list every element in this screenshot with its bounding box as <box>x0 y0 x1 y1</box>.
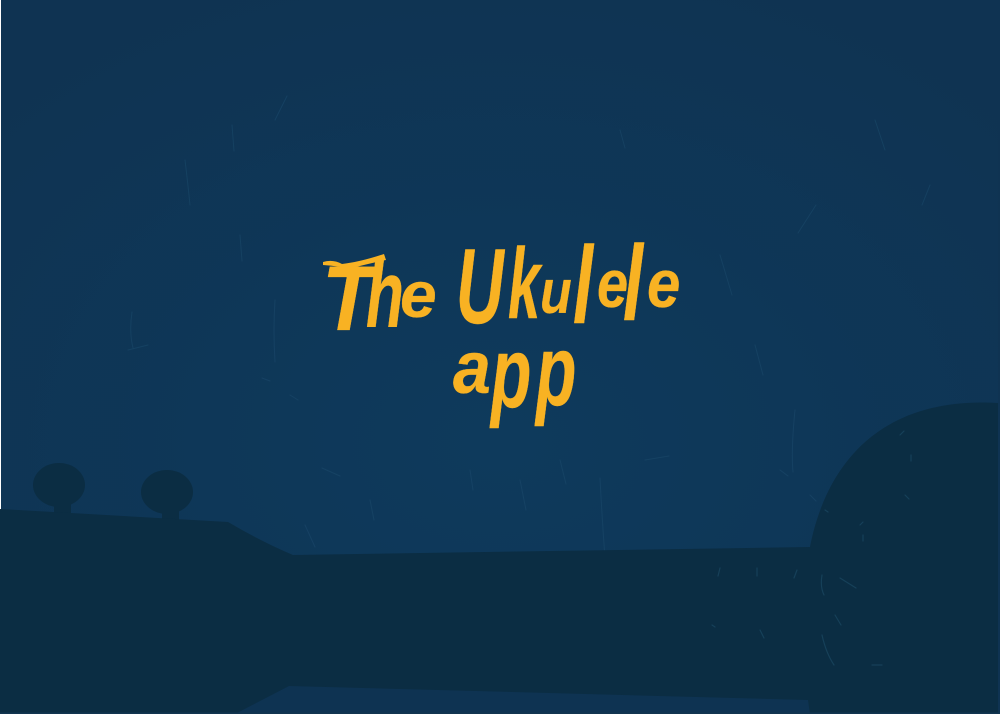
title <box>322 224 680 428</box>
title line 1: The Ukulele: k <box>508 229 543 340</box>
title line 2: app <box>453 314 576 428</box>
title line 2: app: a <box>453 327 491 410</box>
title line 1: The Ukulele <box>322 224 680 350</box>
fretboard inset <box>235 686 810 714</box>
title line 1: The Ukulele: l <box>623 224 644 343</box>
title line 1: The Ukulele: u <box>540 258 572 327</box>
title line 1: The Ukulele: e <box>597 247 628 322</box>
tuning peg left <box>33 463 85 516</box>
title line 1: The Ukulele: e <box>647 245 680 322</box>
title line 2: app: p <box>489 316 531 428</box>
title line 1: The Ukulele: l <box>573 224 595 347</box>
edge strips <box>998 0 1000 714</box>
headstock neck and body <box>0 403 998 714</box>
title line 1: The Ukulele: U <box>456 227 505 346</box>
ukulele silhouette <box>0 403 998 714</box>
title line 1: The Ukulele: T <box>322 247 381 350</box>
title line 1: The Ukulele: e <box>400 258 437 331</box>
title line 2: app: p <box>534 314 576 426</box>
title line 1: The Ukulele: h <box>366 241 404 348</box>
tuning peg right <box>141 470 193 523</box>
